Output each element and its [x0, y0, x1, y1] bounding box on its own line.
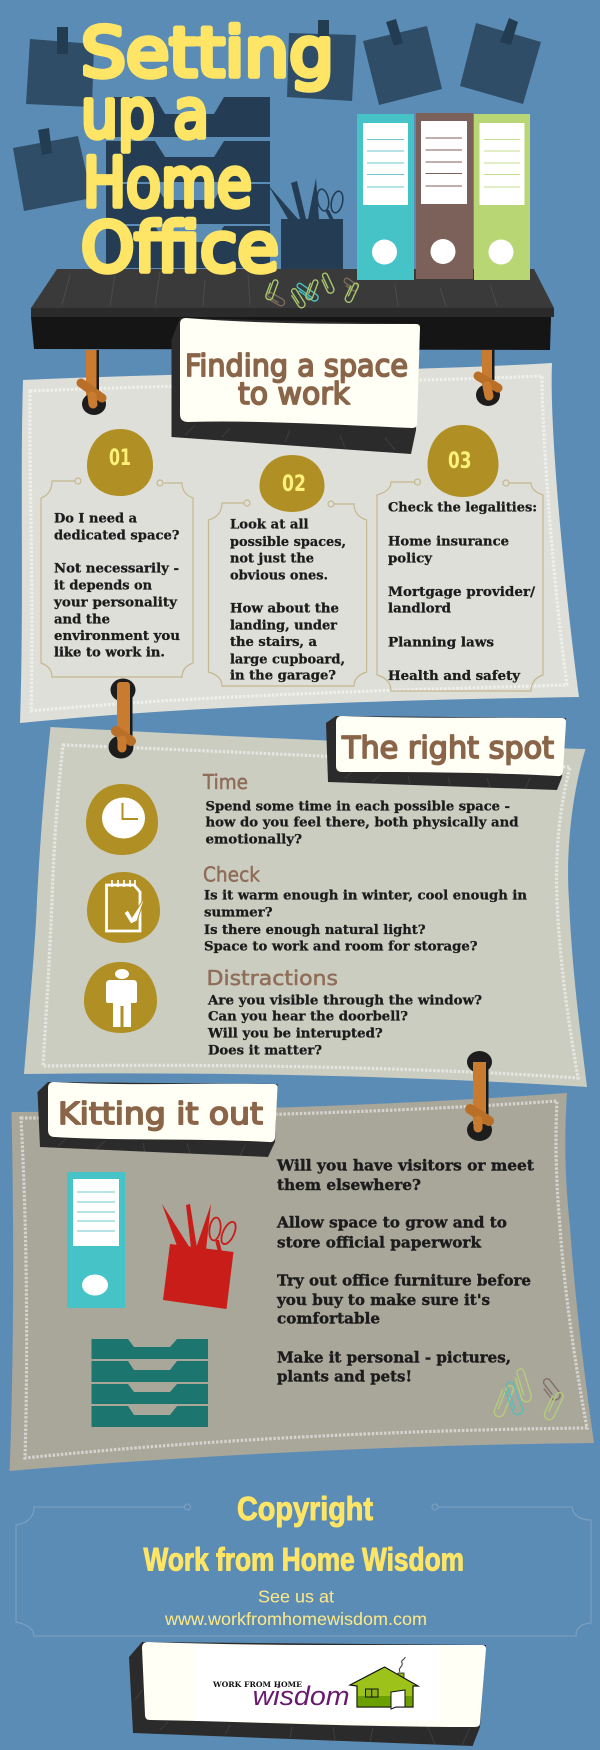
text: distractions: Will you be interupted? — [207, 1027, 383, 1042]
hanging strap: lower — [467, 1051, 492, 1141]
text: kitting it out: comfortable — [277, 1310, 380, 1328]
text: step 01: your personality — [53, 596, 177, 611]
heading: check: Check — [203, 863, 260, 887]
text: step 01: it depends on — [54, 578, 153, 593]
text: step 02: landing, under — [230, 618, 337, 633]
copyright text: Work from Home Wisdom — [144, 1542, 464, 1578]
badge: 01: 01 — [109, 446, 131, 471]
badge: 02 — [260, 455, 324, 512]
icon: teal letter trays — [92, 1339, 208, 1427]
text: distractions — [207, 994, 482, 1059]
text: step 01: dedicated space? — [54, 528, 180, 543]
step 02 — [208, 455, 367, 686]
logo wordmark: wisdom — [253, 1681, 350, 1711]
pen cup — [268, 178, 345, 269]
heading card: finding a space — [172, 318, 420, 454]
text: step 02: the stairs, a — [230, 635, 318, 650]
step 01 — [41, 429, 193, 677]
text: kitting it out: plants and pets! — [277, 1368, 412, 1386]
binders — [357, 113, 530, 280]
text: step 03: Mortgage provider/ — [388, 585, 535, 600]
paper clips on desk — [265, 272, 359, 309]
hanging strap: middle — [108, 678, 136, 758]
text: step 01: environment you — [54, 629, 180, 644]
heading card: finding a space: to work — [238, 377, 351, 412]
title: Office — [81, 209, 279, 288]
text: step 02: not just the — [230, 552, 314, 567]
logo wordmark — [212, 1680, 350, 1711]
icon: teal binder — [67, 1172, 125, 1308]
text: check: Is there enough natural light? — [204, 923, 426, 938]
text: check: summer? — [204, 906, 273, 921]
heading card: kitting it out — [38, 1082, 278, 1157]
text: time: how do you feel there, both physically and — [206, 816, 518, 831]
binder: green — [474, 114, 530, 280]
text: step 03: landlord — [388, 602, 451, 617]
copyright text: Copyright — [237, 1490, 373, 1527]
text: time: emotionally? — [206, 832, 302, 847]
text: step 03: Home insurance — [388, 535, 509, 550]
copyright text: See us at — [258, 1587, 334, 1607]
text: step 02: in the garage? — [230, 668, 336, 683]
binder: brown — [416, 113, 473, 279]
text: step 02: Look at all — [230, 518, 309, 533]
item: distractions — [84, 962, 482, 1059]
text: kitting it out: Try out office furniture before — [277, 1272, 531, 1290]
desk — [31, 269, 554, 350]
text: step 02: large cupboard, — [230, 652, 345, 667]
copyright text: www.workfromhomewisdom.com — [164, 1609, 427, 1629]
panel: kitting it out — [10, 1051, 594, 1471]
panel: finding a space — [20, 318, 579, 723]
badge: 02: 02 — [282, 472, 306, 497]
text: step 03: Check the legalities: — [388, 501, 537, 516]
text: step 01: Do I need a — [54, 512, 138, 527]
icon: person — [84, 962, 157, 1033]
badge: 03 — [428, 425, 498, 497]
text: step 03 — [388, 501, 537, 684]
heading card: kitting it out: Kitting it out — [58, 1097, 263, 1132]
text: step 02 — [230, 518, 346, 683]
heading: distractions: Distractions — [206, 966, 338, 990]
text: step 01 — [53, 512, 180, 661]
icon: clock — [86, 784, 158, 855]
badge: 01 — [87, 429, 153, 496]
text: kitting it out: Will you have visitors or meet — [276, 1157, 534, 1175]
text: step 01: Not necessarily - — [54, 562, 179, 577]
text: distractions: Can you hear the doorbell? — [208, 1010, 408, 1025]
step 03 — [377, 425, 543, 691]
copyright text — [144, 1490, 464, 1629]
text: check: Is it warm enough in winter, cool enough in — [204, 888, 528, 903]
hanging strap: right — [476, 350, 500, 406]
text: kitting it out: store official paperwork — [277, 1234, 482, 1252]
item: check — [87, 863, 528, 955]
hanging strap: left — [81, 350, 106, 415]
text: kitting it out: you buy to make sure it's — [276, 1291, 490, 1309]
text: step 02: possible spaces, — [230, 535, 346, 550]
binder: teal — [357, 114, 414, 280]
logo card — [129, 1642, 486, 1746]
heading: time: Time — [202, 770, 248, 794]
title: Setting — [81, 14, 334, 93]
wall notes with tape — [13, 18, 541, 211]
badge: 03: 03 — [448, 449, 472, 474]
text: kitting it out: Allow space to grow and to — [276, 1214, 507, 1232]
text: kitting it out: Make it personal - pictures, — [277, 1349, 511, 1367]
text: step 03: policy — [388, 552, 432, 567]
frame: step 03 — [377, 482, 543, 691]
letter trays — [106, 97, 270, 268]
text: kitting it out: them elsewhere? — [277, 1176, 421, 1194]
text: step 01: like to work in. — [54, 646, 165, 661]
heading card: the right spot — [326, 716, 566, 790]
text: step 03: Health and safety — [388, 669, 520, 684]
heading card: finding a space: Finding a space — [185, 349, 408, 384]
item: time — [86, 770, 518, 855]
text: step 02: obvious ones. — [230, 568, 328, 583]
heading card: the right spot: The right spot — [341, 731, 554, 766]
text: step 01: and the — [54, 612, 110, 627]
frame: step 01 — [41, 481, 193, 677]
text: step 03: Planning laws — [388, 636, 494, 651]
paper clips: panel corner — [493, 1368, 564, 1421]
text: check: Space to work and room for storage? — [204, 940, 478, 955]
title — [81, 14, 334, 288]
icon: red pen cup — [162, 1204, 239, 1309]
text: kitting it out — [276, 1157, 534, 1386]
logo house — [350, 1657, 418, 1709]
logo wordmark: WORK FROM HOME — [212, 1680, 302, 1689]
text: distractions: Does it matter? — [208, 1044, 322, 1059]
title: Home — [83, 144, 252, 223]
text: step 02: How about the — [230, 602, 339, 617]
text: time — [206, 800, 518, 847]
icon: checklist — [87, 872, 160, 943]
panel: the right spot — [24, 678, 587, 1087]
text: distractions: Are you visible through the window? — [207, 994, 482, 1009]
footer frame — [16, 1504, 591, 1636]
text: time: Spend some time in each possible space - — [206, 800, 510, 815]
text: check — [204, 888, 528, 955]
title: up a — [81, 75, 209, 154]
frame: step 02 — [208, 503, 367, 686]
